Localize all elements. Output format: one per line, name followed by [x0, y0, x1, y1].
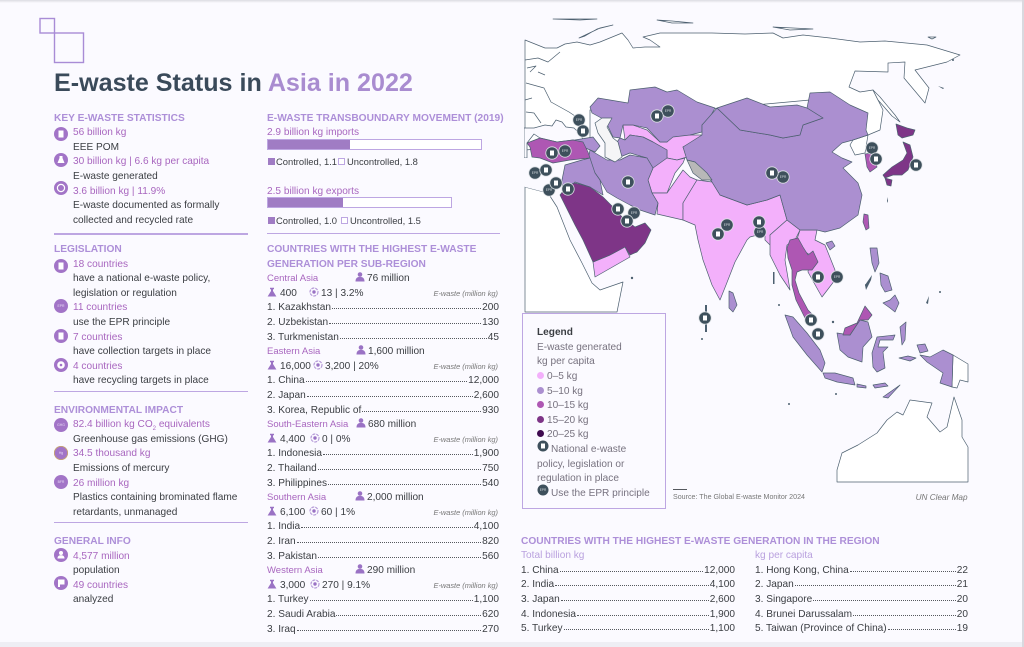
imports stacked bar	[267, 139, 482, 150]
legend subtitle: E-waste generated	[537, 342, 622, 353]
sub-region: Western Asia: 270 | 9.1%	[322, 580, 370, 591]
stat: mercury: Hg	[59, 452, 63, 456]
sub-region: South-Eastern Asia	[267, 418, 499, 489]
sub-region: Southern Asia: 560	[482, 551, 499, 562]
sub-region: Southern Asia: 4,100	[474, 521, 499, 532]
policy marker glyphs	[544, 114, 918, 336]
sub-region: Central Asia: 76 million	[367, 273, 410, 284]
EPR marker labels: EPR	[724, 223, 731, 227]
stat: EPR principle: 11 countries	[73, 302, 127, 313]
sub-region: Southern Asia: Southern Asia	[267, 492, 326, 503]
stat: greenhouse gas	[54, 418, 228, 445]
sub-region: Western Asia: 3. Iraq	[267, 624, 296, 635]
sub-region: Eastern Asia: 2. Japan	[267, 390, 306, 401]
stat: EPR principle: use the EPR principle	[73, 317, 170, 328]
legend: EPR marker: EPR	[540, 488, 547, 492]
stat: e-waste generated: E-waste generated	[73, 171, 158, 182]
sub-region: Southern Asia: 2. Iran	[267, 536, 296, 547]
legend subtitle	[537, 342, 622, 367]
sub-region: Eastern Asia: 16,000	[280, 361, 311, 372]
EPR marker labels: EPR	[631, 211, 638, 215]
mediterranean gap	[524, 158, 562, 193]
sub-region: Western Asia: 270	[482, 624, 499, 635]
stat: national policy	[54, 259, 210, 299]
stat: EEE POM: EEE POM	[73, 142, 119, 153]
imports legend: Uncontrolled, 1.8	[347, 156, 418, 167]
sub-region: South-Eastern Asia: 1,900	[474, 448, 499, 459]
EPR marker labels	[532, 109, 876, 279]
stat: e-waste generated	[54, 153, 210, 182]
stat: countries analyzed	[54, 576, 128, 605]
list: total billion kg: Total billion kg	[521, 550, 584, 561]
panel: map legend	[522, 313, 666, 509]
list: kg per capita: 21	[957, 579, 968, 590]
decorative squares logo	[39, 18, 84, 64]
map markers	[529, 105, 922, 340]
sub-region: Central Asia: 3. Turkmenistan	[267, 332, 339, 343]
stat: EPR principle: EPR	[58, 305, 65, 309]
list: total billion kg: 3. Japan	[521, 594, 560, 605]
sub-region: Central Asia: 1. Kazakhstan	[267, 302, 331, 313]
e-waste 5-10 kg countries	[562, 87, 953, 398]
stat: plastics: retardants, unmanaged	[73, 507, 177, 518]
list: kg per capita: 20	[957, 609, 968, 620]
list: kg per capita: 2. Japan	[755, 579, 794, 590]
black sea	[524, 120, 584, 158]
sub-region: Central Asia	[267, 272, 499, 343]
sub-region: Central Asia: 2. Uzbekistan	[267, 317, 328, 328]
title: E-waste Status in Asia in 2022	[54, 69, 413, 97]
list: kg per capita	[755, 550, 968, 634]
stat: national policy: legislation or regulation	[73, 288, 177, 299]
legend: policy marker: National e-waste	[551, 444, 626, 455]
stat: plastics: Plastics containing brominated flame	[73, 492, 237, 503]
list: total billion kg: 12,000	[704, 565, 735, 576]
legend: EPR marker	[538, 484, 650, 499]
EPR marker labels: EPR	[757, 230, 764, 234]
stat: recycling targets: have recycling targets in place	[73, 375, 209, 386]
panel: transboundary movement	[267, 113, 504, 226]
stat: population: 4,577 million	[73, 550, 130, 562]
list: total billion kg: 2. India	[521, 579, 554, 590]
sub-region: Southern Asia: 3. Pakistan	[267, 551, 317, 562]
stat: population: population	[73, 565, 120, 576]
list: kg per capita: 1. Hong Kong, China	[755, 565, 849, 576]
sub-region: Eastern Asia	[267, 345, 499, 416]
stat: e-waste generated: 30 billion kg | 6.6 kg per capita	[73, 156, 209, 167]
stat: national policy: have a national e-waste policy,	[73, 273, 210, 284]
stat: EEE POM: 56 billion kg	[73, 127, 126, 138]
sub-region: Eastern Asia: Eastern Asia	[267, 346, 320, 357]
stat: collection targets: 7 countries	[73, 332, 122, 343]
list: kg per capita: kg per capita	[755, 550, 813, 561]
stat: greenhouse gas: Greenhouse gas emissions (GHG)	[73, 434, 228, 445]
sub-region: South-Eastern Asia: 680 million	[368, 419, 416, 430]
sub-region: Western Asia: 2. Saudi Arabia	[267, 609, 335, 620]
exports legend: Controlled, 1.0	[276, 215, 337, 226]
sub-region: Southern Asia: 2,000 million	[367, 492, 424, 503]
imports label: 2.9 billion kg imports	[267, 127, 359, 138]
stat: greenhouse gas: 82.4 billion kg CO2 equivalents	[73, 419, 210, 432]
sub-region: Western Asia: E-waste (million kg)	[434, 581, 498, 590]
heading: per sub-region: GENERATION PER SUB-REGION	[267, 259, 426, 270]
stat: collection targets: have collection targets in place	[73, 346, 211, 357]
stat: countries analyzed: 49 countries	[73, 580, 128, 591]
list: total billion kg: 5. Turkey	[521, 623, 563, 634]
exports stacked bar	[267, 197, 452, 208]
legend: 0-5 kg: 0–5 kg	[547, 371, 577, 382]
sub-region: South-Eastern Asia: 2. Thailand	[267, 463, 317, 474]
e-waste 0-5 kg countries	[593, 125, 835, 300]
legend: 10-15 kg: 10–15 kg	[547, 400, 589, 411]
top edge band	[0, 0, 1024, 3]
legend subtitle: kg per capita	[537, 356, 595, 367]
stat: plastics: 26 million kg	[73, 478, 129, 489]
stat: EPR principle	[54, 299, 170, 328]
sub-region: South-Eastern Asia: 0 | 0%	[322, 434, 350, 445]
sub-region: South-Eastern Asia: 4,400	[280, 434, 305, 445]
stat: documented collection rate	[54, 181, 220, 226]
choropleth map of Asia	[524, 18, 968, 482]
heading: transboundary movement: E-WASTE TRANSBOUNDARY MOVEMENT (2019)	[267, 113, 504, 124]
EPR marker labels: EPR	[562, 149, 569, 153]
sub-region: Southern Asia: 6,100	[280, 507, 305, 518]
list: kg per capita: 4. Brunei Darussalam	[755, 609, 852, 620]
exports label: 2.5 billion kg exports	[267, 186, 359, 197]
EPR marker labels: EPR	[546, 188, 553, 192]
map source: Source: The Global E-waste Monitor 2024	[673, 492, 805, 500]
sub-region: Eastern Asia: 930	[482, 405, 499, 416]
list: total billion kg: 4. Indonesia	[521, 609, 576, 620]
legend: policy marker: regulation in place	[537, 473, 619, 484]
imports legend: Controlled, 1.1	[276, 156, 337, 167]
sub-region: Central Asia: E-waste (million kg)	[434, 289, 498, 298]
EPR marker labels: EPR	[780, 175, 787, 179]
exports legend: Uncontrolled, 1.5	[350, 215, 421, 226]
sub-region: Eastern Asia: 3. Korea, Republic of	[267, 405, 361, 416]
sub-region: Western Asia: Western Asia	[267, 565, 323, 576]
legend: EPR marker: Use the EPR principle	[551, 488, 650, 499]
stat: mercury: Emissions of mercury	[73, 463, 169, 474]
list: total billion kg	[521, 550, 735, 634]
panel: highest generation in the region	[521, 536, 968, 634]
EPR marker labels: EPR	[532, 171, 539, 175]
stat: recycling targets: 4 countries	[73, 361, 122, 372]
sub-region: South-Eastern Asia: South-Eastern Asia	[267, 419, 348, 430]
EPR marker labels: EPR	[869, 146, 876, 150]
sub-region: Western Asia	[267, 564, 499, 635]
map credit: UN Clear Map	[916, 493, 968, 502]
legend: 20-25 kg: 20–25 kg	[547, 429, 589, 440]
legend: policy marker	[537, 440, 626, 484]
sub-region: Western Asia: 620	[482, 609, 499, 620]
sub-region: South-Eastern Asia: 3. Philippines	[267, 478, 327, 489]
heading: legislation: LEGISLATION	[54, 244, 122, 255]
divider	[267, 233, 500, 234]
e-waste 10-15 kg countries	[527, 138, 877, 335]
list: kg per capita: 22	[957, 565, 968, 576]
stat: national policy: 18 countries	[73, 259, 128, 270]
imports legend	[268, 156, 418, 167]
bottom edge band	[0, 642, 1024, 647]
sub-region: Central Asia: 400	[280, 288, 297, 299]
heading: environmental impact: ENVIRONMENTAL IMPACT	[54, 405, 183, 416]
panel: left statistics column	[54, 113, 248, 605]
sub-region: Eastern Asia: 2,600	[474, 390, 499, 401]
list: total billion kg: 4,100	[710, 579, 735, 590]
e-waste 15-20 kg countries	[560, 124, 915, 262]
list: kg per capita: 20	[957, 594, 968, 605]
list: total billion kg: 1,100	[710, 623, 735, 634]
right edge band	[1022, 0, 1024, 647]
stat: plastics: BFR	[58, 480, 65, 484]
stat: population	[54, 548, 130, 576]
stat: greenhouse gas: GHG	[57, 423, 65, 427]
sub-region: Eastern Asia: 12,000	[468, 375, 499, 386]
sub-region: South-Eastern Asia: E-waste (million kg)	[434, 435, 498, 444]
sub-region: Central Asia: 45	[488, 332, 499, 343]
sub-region: Southern Asia	[267, 491, 499, 562]
legend: policy marker: policy, legislation or	[537, 459, 624, 470]
EPR marker labels: EPR	[576, 118, 583, 122]
sub-region: Southern Asia: 820	[482, 536, 499, 547]
sub-region: Eastern Asia: 3,200 | 20%	[325, 361, 379, 372]
caspian sea	[595, 118, 622, 162]
list: kg per capita: 5. Taiwan (Province of China)	[755, 623, 887, 634]
EPR marker labels: EPR	[834, 275, 841, 279]
sub-region: South-Eastern Asia: 750	[482, 463, 499, 474]
sub-region: Western Asia: 1. Turkey	[267, 594, 309, 605]
heading: general info: GENERAL INFO	[54, 536, 131, 547]
sub-region: Southern Asia: 60 | 1%	[321, 507, 355, 518]
map source rule	[673, 488, 687, 490]
heading: per sub-region	[267, 244, 476, 270]
stat: documented collection rate: collected and recycled rate	[73, 215, 193, 226]
sub-region: Eastern Asia: 1,600 million	[368, 346, 425, 357]
sub-region: Central Asia: 130	[482, 317, 499, 328]
exports legend	[268, 215, 421, 226]
legend: 5-10 kg: 5–10 kg	[547, 386, 583, 397]
legend title: Legend	[537, 327, 573, 338]
sub-region: Eastern Asia: E-waste (million kg)	[434, 362, 498, 371]
sub-region: Central Asia: Central Asia	[267, 273, 318, 284]
heading: per sub-region: COUNTRIES WITH THE HIGHEST E-WASTE	[267, 244, 476, 255]
kashmir disputed area	[687, 160, 712, 180]
list: kg per capita: 3. Singapore	[755, 594, 812, 605]
list: total billion kg: 1,900	[710, 609, 735, 620]
sub-region: Western Asia: 1,100	[474, 594, 499, 605]
sub-region: Southern Asia: E-waste (million kg)	[434, 508, 498, 517]
sub-region: South-Eastern Asia: 540	[482, 478, 499, 489]
stat: EEE POM	[54, 127, 126, 153]
stat: mercury	[54, 446, 170, 474]
sub-region: Western Asia: 290 million	[367, 565, 415, 576]
stat: plastics	[54, 475, 237, 518]
EPR marker labels: EPR	[665, 109, 672, 113]
sub-region: Southern Asia: 1. India	[267, 521, 300, 532]
list: total billion kg: 1. China	[521, 565, 559, 576]
sub-region: Eastern Asia: 1. China	[267, 375, 305, 386]
heading: region ranking: COUNTRIES WITH THE HIGHEST E-WASTE GENERATION IN THE REGION	[521, 536, 880, 547]
stat: mercury: 34.5 thousand kg	[73, 448, 150, 459]
sub-region: Central Asia: 200	[482, 302, 499, 313]
sub-region: Central Asia: 13 | 3.2%	[321, 288, 363, 299]
list: kg per capita: 19	[957, 623, 968, 634]
stat: collection targets	[54, 329, 211, 357]
sub-region: South-Eastern Asia: 1. Indonesia	[267, 448, 322, 459]
sub-region: Western Asia: 3,000	[280, 580, 305, 591]
heading: key e-waste statistics: KEY E-WASTE STATISTICS	[54, 113, 185, 124]
non-region land	[525, 19, 968, 482]
legend: 15-20 kg: 15–20 kg	[547, 415, 589, 426]
stat: documented collection rate: E-waste documented as formally	[73, 200, 219, 211]
list: total billion kg: 2,600	[710, 594, 735, 605]
panel: highest generation per sub-region	[267, 244, 499, 635]
europe borders	[525, 52, 578, 123]
small islands	[631, 59, 954, 405]
stat: documented collection rate: 3.6 billion kg | 11.9%	[73, 186, 165, 197]
stat: countries analyzed: analyzed	[73, 594, 113, 605]
stat: recycling targets	[54, 358, 209, 386]
